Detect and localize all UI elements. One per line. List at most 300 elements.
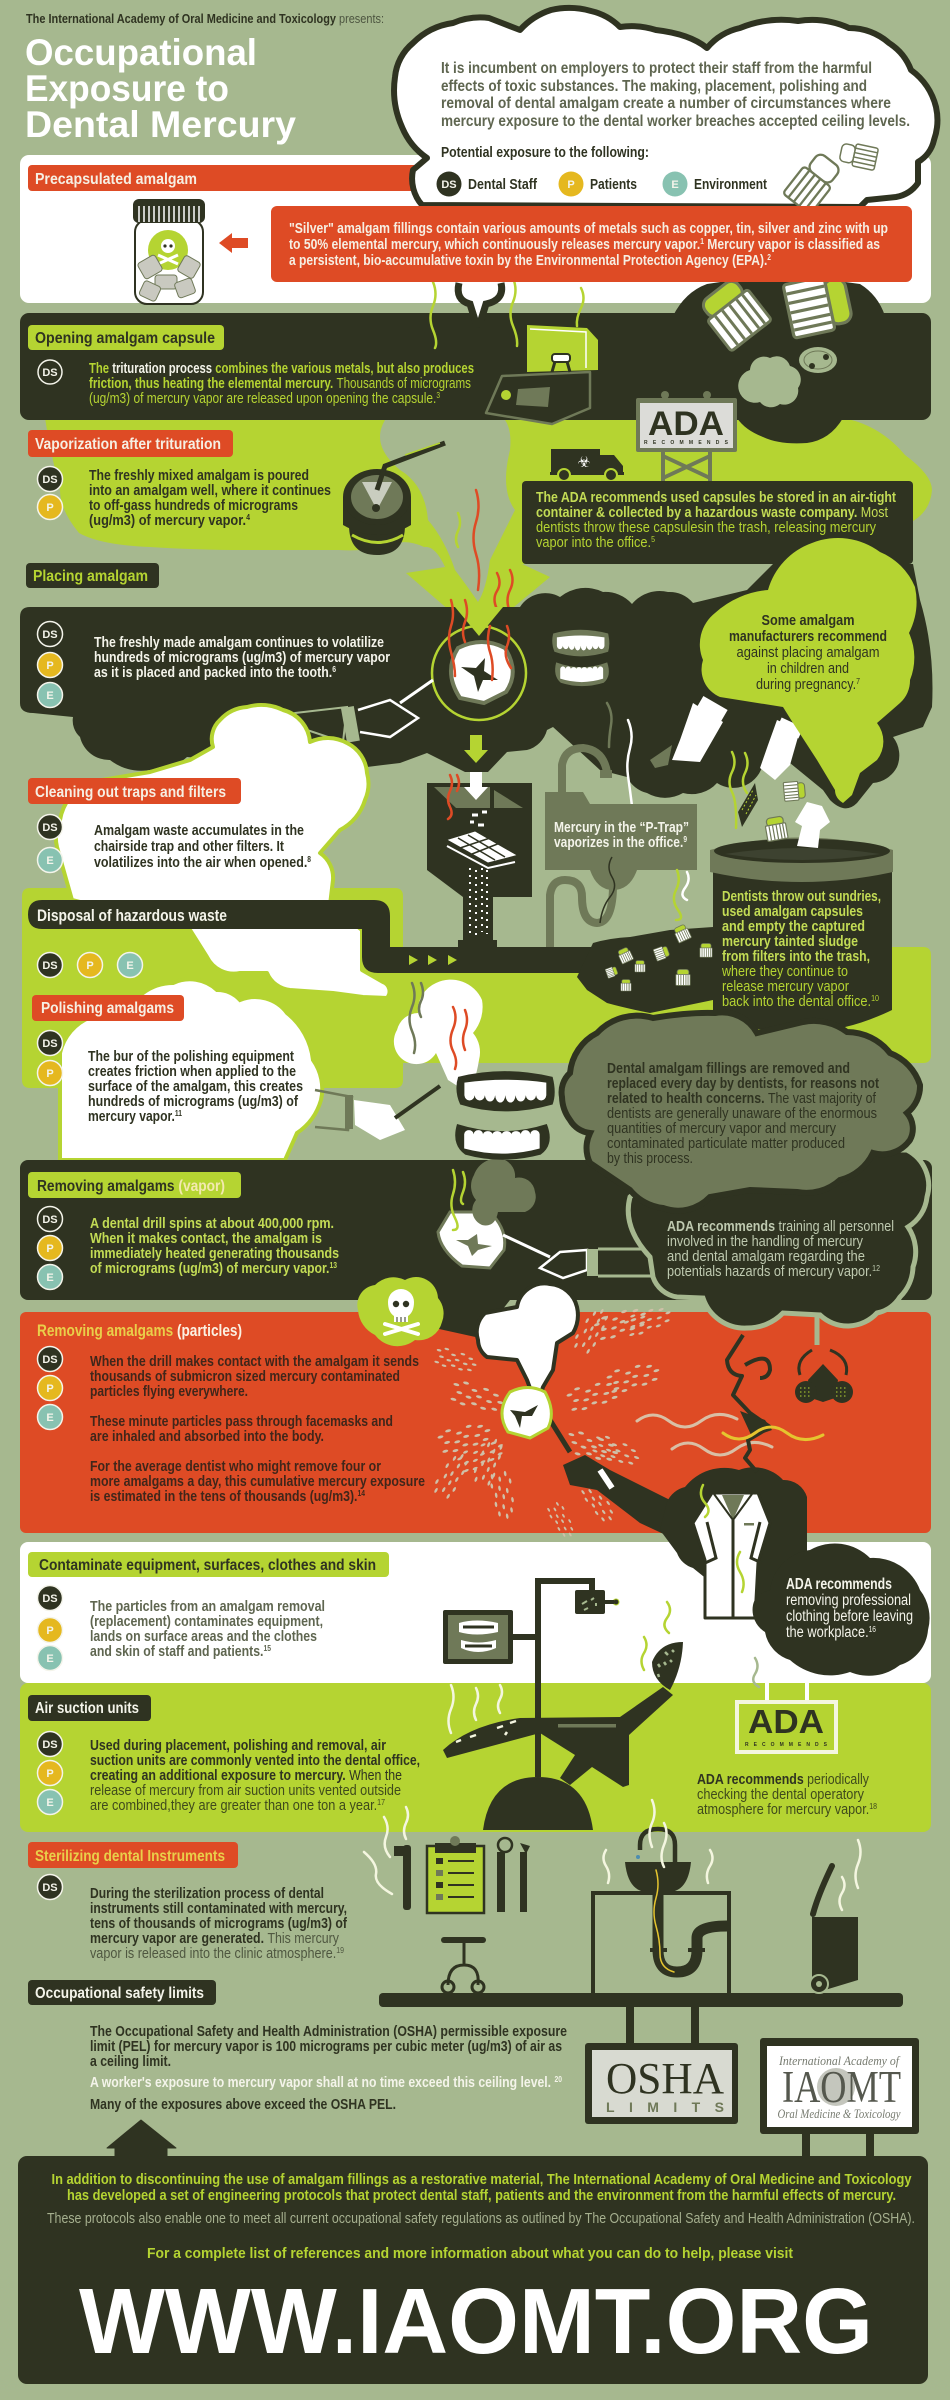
trash can text: 10 <box>871 994 879 1003</box>
intro paragraph: removal of dental amalgam create a number of circumstances where <box>441 95 891 112</box>
trituration text: The trituration process combines the various metals, but also produces <box>89 361 474 377</box>
title <box>25 32 296 145</box>
OSHA text <box>90 2024 567 2113</box>
trash can text: Dentists throw out sundries, <box>722 889 881 905</box>
icon: respirator <box>795 1317 853 1403</box>
trash items falling <box>738 781 830 848</box>
icon: ADA billboard: RECOMMENDS <box>644 440 729 446</box>
P-trap sign <box>545 748 697 947</box>
icon: amalgam well <box>343 443 445 555</box>
arrows in pipe <box>409 955 457 965</box>
legend <box>436 172 767 196</box>
polishing text: surface of the amalgam, this creates <box>88 1079 303 1095</box>
particles text: For the average dentist who might remove four or <box>90 1459 381 1475</box>
cleaning text: 8 <box>307 855 311 864</box>
label: opening amalgam capsule: Opening amalgam capsule <box>35 330 215 347</box>
polishing text: creates friction when applied to the <box>88 1064 296 1080</box>
icon: skull cloud <box>357 1277 444 1346</box>
badges: disposal <box>38 952 142 978</box>
ADA recommendation panel: dentists throw these capsulesin the trash, releasing mercury <box>536 520 877 536</box>
olive cloud text: quantities of mercury vapor and mercury <box>607 1121 837 1137</box>
icon: drip smoke under callout <box>458 283 502 324</box>
label: vaporization: Vaporization after trituration <box>35 436 221 453</box>
badge DS <box>38 360 62 384</box>
OSHA sign <box>585 2007 738 2124</box>
legend: E <box>671 179 679 191</box>
label: placing amalgam: Placing amalgam <box>33 568 148 585</box>
label: placing amalgam <box>26 563 159 588</box>
icon: stool <box>441 1937 486 1993</box>
label: contaminate <box>28 1552 389 1577</box>
badges: P <box>46 1768 54 1780</box>
badges: P <box>46 1068 54 1080</box>
olive cloud text: replaced every day by dentists, for reasons not <box>607 1076 879 1092</box>
vaporization text: to off-gass hundreds of micrograms <box>89 498 298 514</box>
intro paragraph: It is incumbent on employers to protect their staff from the harmful <box>441 60 872 77</box>
label: vaporization <box>28 430 233 457</box>
sterilizing text <box>90 1886 347 1962</box>
icon: tooth with smoke and drill <box>438 1159 652 1278</box>
heap capsules <box>605 924 712 991</box>
particle spray <box>430 1302 674 1541</box>
badges: DS <box>42 1038 58 1050</box>
wiggles: near trash <box>674 752 748 920</box>
ADA recommendation panel: 5 <box>651 535 655 544</box>
title: Dental Mercury <box>25 104 296 145</box>
OSHA sign: LIMITS <box>606 2099 724 2115</box>
sterilizing text: vapor is released into the clinic atmosphere. <box>90 1946 373 1962</box>
OSHA text: limit (PEL) for mercury vapor is 100 micrograms per cubic meter (ug/m3) of air as <box>90 2039 562 2055</box>
placing text: 6 <box>332 665 336 674</box>
trash can text: and empty the captured <box>722 919 865 935</box>
P-trap text: vaporizes in the office. <box>554 835 710 851</box>
icon: dental tools <box>497 1838 530 1912</box>
OSHA sign: OSHA <box>606 2054 724 2103</box>
arrow: white down <box>464 772 488 800</box>
badges: P <box>46 1383 54 1395</box>
trash can text: release mercury vapor <box>722 979 849 995</box>
badges: DS <box>42 474 58 486</box>
monitor <box>443 1610 513 1664</box>
callout: silver amalgam <box>271 206 912 282</box>
panel: disposal green background <box>22 888 931 1088</box>
wiggles: sterilizing vapor <box>364 1800 860 1910</box>
trash can text: back into the dental office. <box>722 994 890 1010</box>
clothing text: clothing before leaving <box>786 1608 913 1625</box>
particles text: thousands of submicron sized mercury contaminated <box>90 1369 400 1385</box>
badges <box>38 1206 62 1290</box>
badges: disposal: E <box>126 960 134 972</box>
particles text: These minute particles pass through facemasks and <box>90 1414 393 1430</box>
lab coat <box>693 1485 770 1618</box>
placing text: as it is placed and packed into the tooth. <box>94 665 374 681</box>
yellow vapor line <box>723 1427 823 1440</box>
contaminate text <box>90 1599 325 1660</box>
icon: ADA sign: RECOMMENDS <box>745 1742 828 1748</box>
badges: P <box>46 1243 54 1255</box>
placing text: The freshly made amalgam continues to volatilize <box>94 635 384 651</box>
sterilizing text: 19 <box>336 1946 344 1955</box>
badges: E <box>46 1272 54 1284</box>
intro cloud <box>394 8 937 215</box>
cleaning text: chairside trap and other filters. It <box>94 838 284 855</box>
ADA recommendation panel <box>522 481 913 564</box>
placing text: hundreds of micrograms (ug/m3) of mercury vapor <box>94 650 390 666</box>
particles text: particles flying everywhere. <box>90 1384 248 1400</box>
title: Occupational <box>25 32 257 73</box>
cloud: olive statement <box>562 1012 920 1211</box>
arrow: up <box>107 2120 176 2158</box>
ADA training text: involved in the handling of mercury <box>667 1234 864 1250</box>
icon: ADA billboard: ADA <box>648 405 724 443</box>
face profile <box>727 1335 770 1472</box>
URL: WWW.IAOMT.ORG <box>79 2269 873 2373</box>
icon: filter funnel <box>427 735 532 947</box>
vapor text <box>90 1216 339 1277</box>
badges: P <box>46 660 54 672</box>
cloud: ADA training <box>628 1150 929 1328</box>
label: contaminate: Contaminate equipment, surfaces, clothes and skin <box>39 1557 376 1574</box>
vaporization text: 4 <box>246 513 250 522</box>
visit prompt: For a complete list of references and more information about what you can do to help, please visit <box>147 2246 793 2262</box>
icon: ADA sign: ADA <box>748 1703 824 1740</box>
dark spill behind skull <box>430 1300 510 1338</box>
trash can text: where they continue to <box>721 964 848 980</box>
badges: E <box>46 1797 54 1809</box>
badges: E <box>46 1653 54 1665</box>
ADA training text: potentials hazards of mercury vapor. <box>667 1264 901 1280</box>
vapor wiggles <box>430 278 584 348</box>
particles text: are inhaled and absorbed into the body. <box>90 1429 324 1445</box>
P-trap text <box>554 820 689 851</box>
badges: DS <box>42 1214 58 1226</box>
badges: DS <box>42 1593 58 1605</box>
air suction text: creating an additional exposure to mercury. When the <box>90 1768 402 1784</box>
contaminate text: lands on surface areas and the clothes <box>90 1629 317 1645</box>
trash can and heap <box>577 752 893 1031</box>
ADA recommendation panel: container & collected by a hazardous waste company. Most <box>536 505 888 521</box>
label: cleaning: Cleaning out traps and filters <box>35 784 226 801</box>
manufacturers text: in children and <box>767 661 849 677</box>
contaminate text: 15 <box>263 1644 271 1653</box>
icon: ADA sign <box>737 1682 836 1752</box>
badge DS: DS <box>42 367 58 379</box>
dark cloud around coat <box>660 1467 807 1630</box>
OSHA text: a ceiling limit. <box>90 2054 171 2070</box>
icon: jar of capsules with skull <box>133 199 205 304</box>
vapor text: A dental drill spins at about 400,000 rpm. <box>90 1216 334 1232</box>
manufacturers text: 7 <box>856 677 860 686</box>
polishing text: mercury vapor. <box>88 1109 192 1125</box>
ADA periodic text: 18 <box>869 1802 877 1811</box>
label: polishing: Polishing amalgams <box>41 1000 174 1017</box>
clothing text: the workplace. <box>786 1624 886 1641</box>
badges <box>38 1030 62 1086</box>
particles text: 14 <box>357 1489 365 1498</box>
contaminate text: (replacement) contaminates equipment, <box>90 1614 323 1630</box>
badges <box>38 1346 62 1430</box>
callout: silver amalgam: to 50% elemental mercury, which continuously releases mercury vapor. <box>289 237 780 253</box>
icon: hands disposing of capsule and filter <box>650 696 803 780</box>
polishing text: hundreds of micrograms (ug/m3) of <box>88 1094 298 1110</box>
OSHA text: Many of the exposures above exceed the OSHA PEL. <box>90 2097 396 2113</box>
callout: silver amalgam: Mercury vapor is classified as <box>704 237 880 253</box>
icon: green capsules <box>696 272 854 351</box>
badges: DS <box>42 1739 58 1751</box>
trash can text <box>721 889 881 1010</box>
icon: hand with placement tool <box>292 680 433 743</box>
particles text <box>90 1354 425 1505</box>
sterilizing text: During the sterilization process of dental <box>90 1886 324 1902</box>
OSHA text: 20 <box>554 2075 562 2084</box>
particles text: is estimated in the tens of thousands (ug/m3). <box>90 1489 406 1505</box>
icon: amalgam blob and petri dish <box>738 347 837 407</box>
icon: capsule outlines <box>783 141 878 215</box>
badges: E <box>46 690 54 702</box>
legend: Environment <box>694 177 767 193</box>
legend: Dental Staff <box>468 177 537 193</box>
vaporization text: into an amalgam well, where it continues <box>89 483 331 499</box>
label: removing vapor <box>28 1172 241 1198</box>
callout cloud: amalgam manufacturers <box>700 538 917 803</box>
callout: silver amalgam: a persistent, bio-accumulative toxin by the Environmental Protection Agency (EPA). <box>289 253 865 269</box>
particles text: more amalgams a day, this cumulative mercury exposure <box>90 1474 425 1490</box>
label: air suction <box>28 1695 151 1721</box>
panel: removing amalgams (particles) <box>20 1302 931 1541</box>
sterilizing text: tens of thousands of micrograms (ug/m3) of <box>90 1916 347 1932</box>
clothing text: ADA recommends <box>786 1576 892 1593</box>
panel: precapsulated amalgam <box>20 155 931 304</box>
label: polishing <box>32 995 184 1021</box>
icon: hazardous waste truck <box>550 449 624 481</box>
wiggles in cloud <box>607 703 632 806</box>
cleaning text: Amalgam waste accumulates in the <box>94 822 304 839</box>
grey smoke column <box>380 420 515 602</box>
badges <box>38 622 62 708</box>
polishing text: 11 <box>175 1109 182 1118</box>
ADA recommendation panel: vapor into the office. <box>536 535 666 551</box>
arrow pointing to jar <box>219 233 248 253</box>
olive cloud text: dentists are generally unaware of the enormous <box>607 1106 877 1122</box>
contaminate text: and skin of staff and patients. <box>90 1644 295 1660</box>
OSHA text: The Occupational Safety and Health Administration (OSHA) permissible exposure <box>90 2024 567 2040</box>
icon: hand with polisher <box>315 1086 440 1140</box>
air suction text: 17 <box>377 1798 385 1807</box>
particle title: Removing amalgams (particles) <box>37 1321 242 1340</box>
air suction text <box>90 1738 420 1814</box>
P-trap text: 9 <box>683 835 687 844</box>
label: precapsulated amalgam: Precapsulated amalgam <box>35 171 197 188</box>
manufacturers text: against placing amalgam <box>736 645 880 661</box>
intro paragraph <box>441 60 910 130</box>
white panel: contaminate equipment <box>20 1542 931 1683</box>
pipe: disposal of hazardous waste <box>28 900 600 973</box>
manufacturers text <box>729 613 887 693</box>
legend heading: Potential exposure to the following: <box>441 145 649 161</box>
legend: DS <box>441 179 457 191</box>
clothing text <box>786 1576 913 1641</box>
IAOMT sign <box>760 2038 919 2158</box>
pipe heading: Disposal of hazardous waste <box>37 907 227 925</box>
IAOMT sign: International Academy of <box>778 2053 901 2068</box>
olive cloud text: Dental amalgam fillings are removed and <box>607 1061 850 1077</box>
ADA training text: 12 <box>872 1264 880 1273</box>
IAOMT sign: Oral Medicine & Toxicology <box>778 2106 901 2121</box>
section: ADA recommends capsule storage <box>522 391 913 564</box>
trituration text <box>89 361 474 407</box>
callout: silver amalgam: 2 <box>767 253 771 262</box>
air suction text: are combined,they are greater than one ton a year. <box>90 1798 416 1814</box>
arrow: green down <box>464 735 488 763</box>
sterilizing text: instruments still contaminated with mercury, <box>90 1901 347 1917</box>
vaporization text: The freshly mixed amalgam is poured <box>89 468 309 484</box>
icon: hazardous waste truck: ☣ <box>577 453 591 471</box>
trituration text: 3 <box>436 391 440 400</box>
ADA recommendation panel: The ADA recommends used capsules be stored in an air-tight <box>536 490 896 506</box>
badges: P <box>46 1625 54 1637</box>
trash can text: mercury tainted sludge <box>722 934 858 950</box>
olive cloud text: by this process. <box>607 1151 693 1167</box>
label: removing vapor: Removing amalgams (vapor) <box>37 1178 225 1195</box>
panel: footer call to action <box>18 2156 928 2384</box>
icon: triturator machine <box>486 325 598 424</box>
label: sterilizing: Sterilizing dental Instruments <box>35 1848 225 1865</box>
vapor text: When it makes contact, the amalgam is <box>90 1231 322 1247</box>
OSHA text: A worker's exposure to mercury vapor shall at no time exceed this ceiling level. <box>90 2075 637 2091</box>
polishing smoke with tools <box>315 980 483 1140</box>
manufacturers text: Some amalgam <box>762 613 854 629</box>
green vapor blob behind vaporization section <box>45 418 932 636</box>
panel: placing amalgam dark cloud <box>20 564 932 808</box>
icon: sink with trap <box>591 1829 731 1993</box>
chair <box>443 1687 673 1787</box>
arm with drill <box>545 1412 570 1452</box>
section: occupational safety limits <box>28 1980 919 2158</box>
badges: disposal: P <box>86 960 94 972</box>
cloud: polishing amalgams <box>32 979 322 1160</box>
badges: E <box>46 1412 54 1424</box>
particles tooth with smoke <box>477 1283 578 1438</box>
icon: tooth in ring <box>432 600 526 720</box>
badges: DS <box>42 1354 58 1366</box>
ADA periodic text: ADA recommends periodically <box>697 1772 870 1788</box>
label: safety limits: Occupational safety limits <box>35 1985 204 2002</box>
sterilizing text: mercury vapor are generated. This mercury <box>90 1931 340 1947</box>
icon: trash bin <box>810 1866 858 1993</box>
cleaning text: volatilizes into the air when opened. <box>94 854 351 871</box>
dark bulges around capsules <box>673 278 885 443</box>
green panel: air suction units <box>20 1682 931 1832</box>
vaporization text: (ug/m3) of mercury vapor. <box>89 513 267 529</box>
particles text: When the drill makes contact with the amalgam it sends <box>90 1354 419 1370</box>
section: vaporization after trituration <box>28 430 512 612</box>
badges: E <box>46 855 54 867</box>
lines: inhaled vapors <box>637 1414 772 1455</box>
badges: DS <box>42 629 58 641</box>
label: precapsulated amalgam <box>28 165 908 191</box>
air suction text: Used during placement, polishing and removal, air <box>90 1738 386 1754</box>
label: sterilizing <box>28 1842 238 1868</box>
title: Exposure to <box>25 68 229 109</box>
icon: dental chair with equipment <box>443 1581 683 1830</box>
ADA periodic text: checking the dental operatory <box>697 1787 865 1803</box>
badges <box>38 1732 62 1814</box>
cleaning text <box>94 822 311 871</box>
badge DS: DS <box>42 1882 58 1894</box>
trituration text: (ug/m3) of mercury vapor are released upon opening the capsule. <box>89 391 511 407</box>
cloud: ADA remove clothing <box>753 1543 930 1676</box>
ADA training text: ADA recommends training all personnel <box>667 1219 894 1235</box>
green tip of arrow into tooth ring <box>455 607 503 636</box>
badges: P <box>46 502 54 514</box>
placing text <box>94 635 390 681</box>
icon: ADA billboard <box>636 391 737 481</box>
legend: Patients <box>590 177 637 193</box>
air suction text: release of mercury from air suction units vented outside <box>90 1783 401 1799</box>
manufacturers text: manufacturers recommend <box>729 629 887 645</box>
wiggles: vapor around chair <box>448 1602 759 1733</box>
label: air suction: Air suction units <box>35 1700 139 1717</box>
clothing text: 16 <box>869 1625 876 1634</box>
vaporization text <box>89 468 331 529</box>
icon: polishing teeth <box>455 1071 555 1160</box>
badges <box>38 1586 62 1670</box>
icon: handpiece <box>394 1845 411 1910</box>
contaminate text: The particles from an amalgam removal <box>90 1599 325 1615</box>
ADA training text <box>667 1219 894 1280</box>
header line: The International Academy of Oral Medicine and Toxicology presents: <box>26 11 384 26</box>
panel: opening amalgam capsule <box>20 272 931 443</box>
badges <box>38 466 62 520</box>
footer paragraph <box>47 2172 915 2227</box>
ADA periodic text <box>697 1772 877 1818</box>
polishing text <box>88 1049 303 1125</box>
polishing text: The bur of the polishing equipment <box>88 1049 294 1065</box>
ADA periodic text: atmosphere for mercury vapor. <box>697 1802 894 1818</box>
badge DS <box>38 1874 62 1900</box>
air suction text: suction units are commonly vented into the dental office, <box>90 1753 420 1769</box>
person: face, arm, coat <box>545 1317 853 1630</box>
panel: removing amalgams (vapor) <box>20 1159 932 1300</box>
IAOMT sign: IAOMT <box>782 2062 901 2112</box>
trituration text: friction, thus heating the elemental mercury. Thousands of micrograms <box>89 376 471 392</box>
badges: DS <box>42 822 58 834</box>
vapor text: immediately heated generating thousands <box>90 1246 339 1262</box>
olive cloud text: contaminated particulate matter produced <box>607 1136 845 1152</box>
olive cloud text <box>607 1061 879 1167</box>
label: opening amalgam capsule <box>28 325 224 350</box>
badges: disposal: DS <box>42 960 58 972</box>
manufacturers text: during pregnancy. <box>756 677 871 693</box>
label: cleaning <box>28 778 241 804</box>
trash can text: used amalgam capsules <box>722 904 863 920</box>
wiggles: polishing <box>410 983 467 1069</box>
ADA training text: and dental amalgam regarding the <box>667 1249 865 1265</box>
cloud: cleaning out traps and filters <box>28 705 390 998</box>
callout: silver amalgam: 1 <box>700 237 704 246</box>
intro paragraph: effects of toxic substances. The making, placement, polishing and <box>441 78 867 95</box>
P-trap text: Mercury in the “P-Trap” <box>554 820 689 836</box>
white smoke puff <box>394 980 483 1092</box>
icon: clipboard <box>427 1836 484 1913</box>
wiggles: rising vapor <box>456 490 512 612</box>
legend: P <box>567 179 575 191</box>
label: safety limits <box>28 1980 216 2005</box>
clothing text: removing professional <box>786 1592 911 1609</box>
badges <box>38 814 62 872</box>
section: sterilizing dental instruments <box>28 1800 903 2007</box>
icon: teeth <box>552 630 609 686</box>
